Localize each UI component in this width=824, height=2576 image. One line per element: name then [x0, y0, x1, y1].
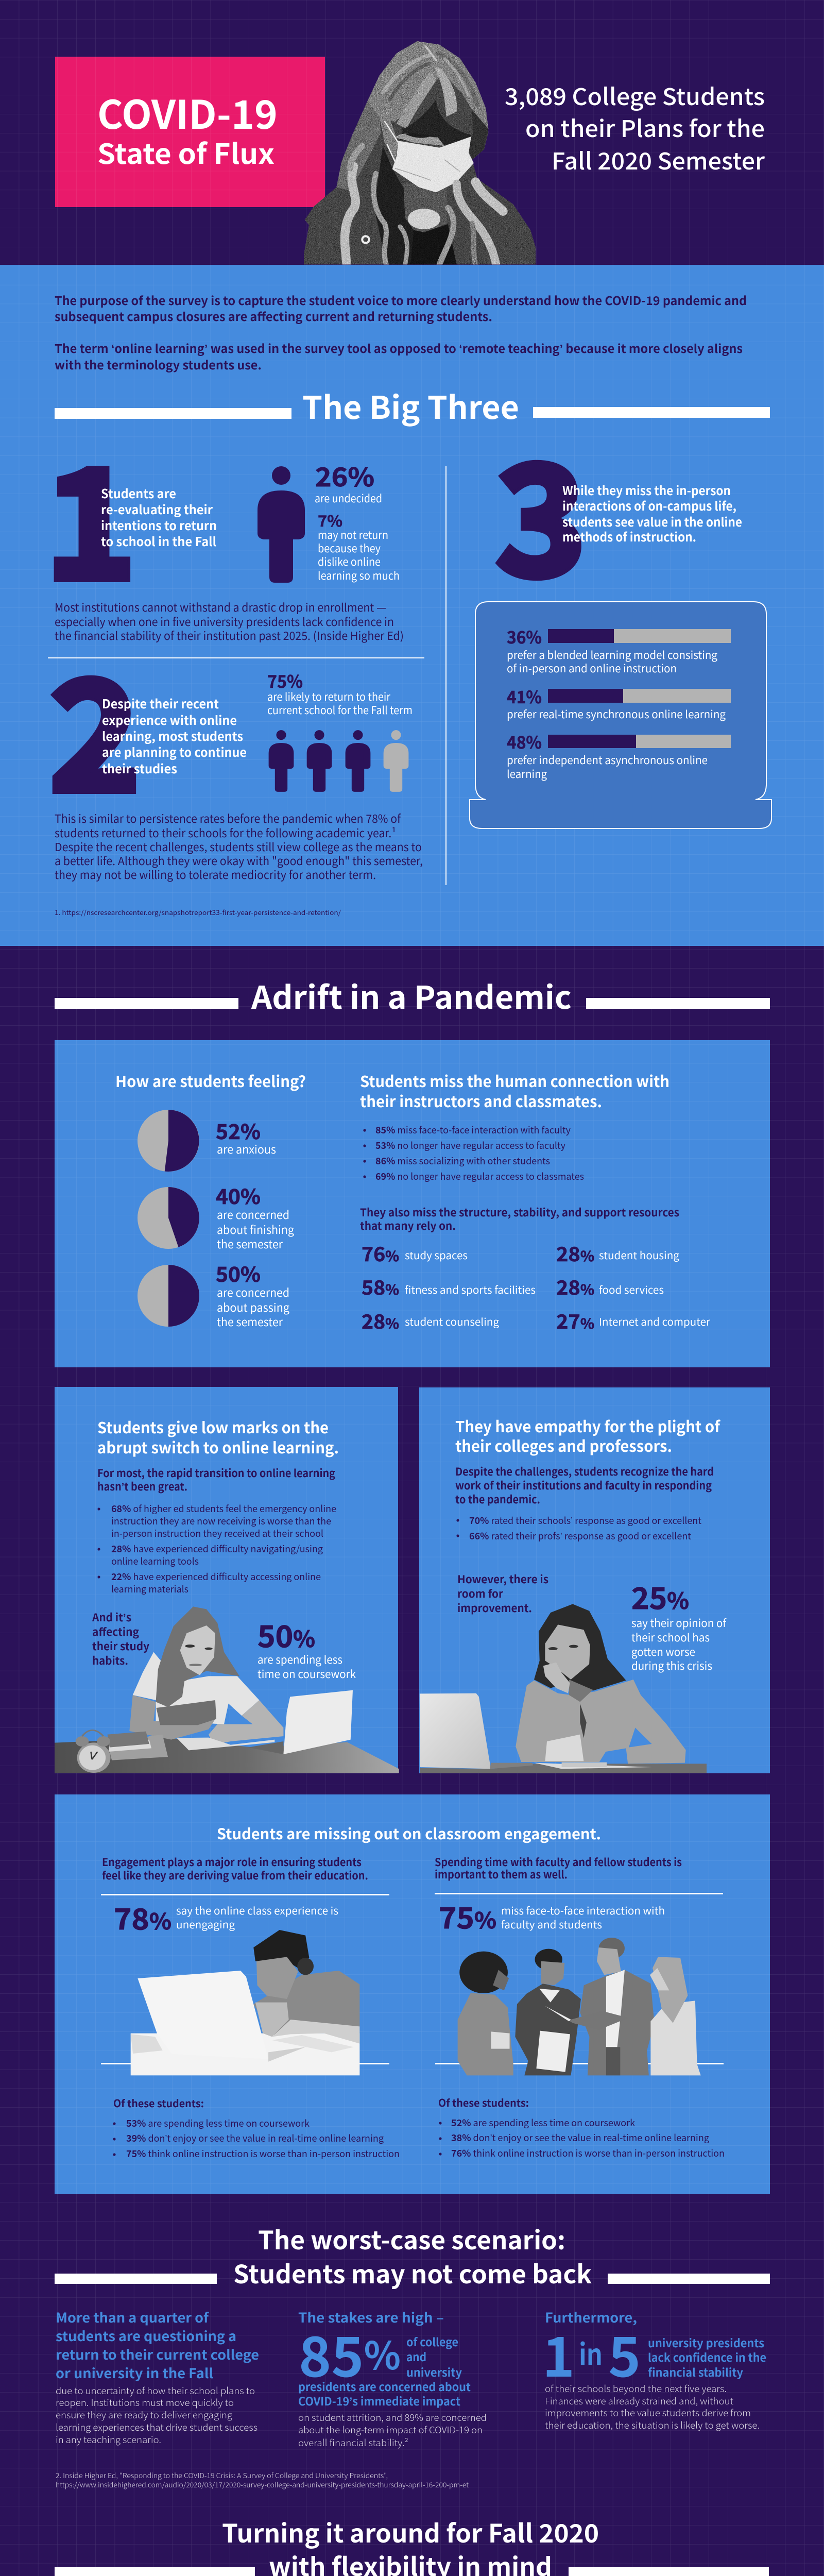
pie: 52% anxious — [138, 1110, 276, 1172]
pie: 50% passing: about passing — [217, 1299, 290, 1315]
stat: 75% — [267, 668, 413, 718]
callout: study habits: habits. — [92, 1653, 128, 1668]
pie: 40% finishing: 40% — [216, 1180, 261, 1210]
bar: 36% blended: 36% — [507, 624, 542, 649]
finding 1 statement: to school in the Fall — [101, 532, 216, 550]
pie: 40% finishing: about finishing — [217, 1221, 295, 1238]
heading: worst-case scenario — [55, 2221, 770, 2291]
stat: 75%: 75% — [267, 668, 303, 693]
subheading: time with faculty — [435, 1854, 682, 1882]
stat: 25% opinion worse: gotten worse — [631, 1644, 695, 1659]
hero photo: masked student — [304, 41, 536, 264]
bullet list: online learning problems: instruction they are now receiving is worse than the — [111, 1514, 331, 1528]
text: enrollment note — [55, 599, 404, 643]
stats grid: resources: student housing — [599, 1247, 679, 1262]
header: title block — [55, 41, 765, 264]
stat: 1 in 5: 1 — [542, 2313, 575, 2393]
list: of these students left: 53% are spending less time on coursework — [126, 2116, 310, 2130]
title box: State of Flux — [97, 131, 274, 172]
icon: four people — [269, 730, 408, 792]
list: of these students right: Of these students: — [438, 2095, 529, 2110]
panel: finding two — [47, 612, 423, 917]
stat: 75% miss interaction: 75% — [439, 1895, 496, 1937]
stat: 25% opinion worse: their school has — [631, 1630, 710, 1645]
text: persistence note: Despite the recent challenges, students still view college as the means to — [55, 838, 422, 855]
heading: Adrift in a Pandemic: Adrift in a Pandemic — [251, 972, 572, 1018]
stats grid: resources: food services — [599, 1282, 664, 1297]
bullet list: human connection: 69% no longer have regular access to classmates — [375, 1170, 584, 1183]
bar: 41% synchronous: prefer real-time synchronous online learning — [507, 706, 726, 722]
finding 3 statement: interactions of on-campus life, — [562, 496, 736, 514]
column: more than a quarter: return to their current college — [56, 2345, 259, 2364]
heading: turning it around — [55, 2514, 769, 2576]
column: 1 in 5 presidents: of their schools beyond the next five years. — [545, 2382, 727, 2395]
finding 2 statement: Despite their recent — [102, 694, 219, 712]
finding 3 statement: methods of instruction. — [562, 527, 696, 545]
stats grid: resources: Internet and computer — [599, 1314, 710, 1329]
stat: 7% may not return: because they — [318, 540, 381, 556]
column: more than a quarter: or university in the Fall — [56, 2363, 213, 2382]
subheading: rapid transition — [97, 1465, 335, 1494]
panel: empathy for colleges — [420, 1414, 727, 1773]
column: more than a quarter: students are questioning a — [56, 2326, 236, 2345]
stat: 50% less coursework — [258, 1613, 356, 1682]
numeral 1: 1 — [43, 400, 139, 626]
pie: 40% finishing: are concerned — [217, 1206, 289, 1223]
numeral 3: 3 — [493, 397, 589, 622]
list: of these students right: 38% don’t enjoy or see the value in real-time online learning — [451, 2131, 709, 2144]
list: of these students left — [113, 2095, 400, 2160]
finding 2 statement: are planning to continue — [102, 742, 247, 760]
column: more than a quarter: learning experiences that drive student success — [56, 2420, 258, 2434]
heading: worst-case scenario: The worst-case scenario: — [258, 2221, 565, 2257]
text: enrollment note: especially when one in five university presidents lack confidence in — [55, 613, 394, 630]
intro text: subsequent campus closures are affecting current and returning students. — [55, 307, 492, 325]
subtitle: on their Plans for the — [525, 110, 765, 144]
subheading: rapid transition: For most, the rapid transition to online learning — [97, 1465, 335, 1481]
footnote 1: 1. https://nscresearchcenter.org/snapshotreport33-first-year-persistence-and-retention/ — [55, 907, 341, 917]
column: more than a quarter: in any teaching scenario. — [56, 2433, 161, 2446]
heading: engagement: Students are missing out on classroom engagement. — [217, 1822, 601, 1844]
column: 85% stakes: overall financial stability.² — [298, 2436, 408, 2449]
title box — [55, 57, 325, 207]
stats grid: resources: fitness and sports facilities — [405, 1282, 536, 1297]
subheading: human connection: Students miss the human connection with — [360, 1069, 670, 1092]
finding 2 statement: learning, most students — [102, 726, 243, 744]
panel: classroom engagement — [101, 1822, 725, 2160]
subheading: value from education: feel like they are deriving value from their education. — [102, 1868, 368, 1883]
bullet list: ratings — [456, 1514, 701, 1543]
finding 3 statement — [562, 481, 742, 545]
footnote 2: 2. Inside Higher Ed, "Responding to the COVID-19 Crisis: A Survey of College and University Presidents", — [56, 2470, 388, 2480]
callout: study habits: affecting — [92, 1624, 139, 1639]
callout: room for improvement: room for — [457, 1586, 504, 1601]
panel: finding one — [43, 400, 404, 643]
subheading: How are students feeling?: How are students feeling? — [115, 1069, 306, 1092]
footnote 2: https://www.insidehighered.com/audio/2020/03/17/2020-survey-college-and-university-presidents-thursday-april-16-200-pm-et — [56, 2479, 469, 2489]
panel: finding three — [470, 397, 771, 828]
pie: 52% anxious: 52% — [216, 1115, 261, 1145]
pie: 50% passing: the semester — [217, 1313, 283, 1330]
stat: 75%: are likely to return to their — [267, 689, 391, 704]
photo: student with headphones and laptop — [131, 1930, 359, 2075]
footnote 2 — [56, 2470, 469, 2489]
finding 3 statement: students see value in the online — [562, 512, 742, 530]
column: more than a quarter: More than a quarter of — [56, 2308, 209, 2327]
pie: 50% passing: 50% — [216, 1258, 261, 1288]
subheading: structure and stability: that many rely on. — [360, 1218, 456, 1233]
bar: 36% blended — [507, 624, 731, 676]
heading: turning it around: Turning it around for Fall 2020 — [222, 2514, 599, 2550]
stats grid: resources: 28% — [362, 1306, 399, 1334]
list: of these students left: Of these students: — [113, 2095, 204, 2110]
bullet list: human connection: 86% miss socializing with other students — [375, 1154, 550, 1167]
stats grid: resources: 27% — [556, 1306, 594, 1334]
list: of these students right: 76% think online instruction is worse than in-person instruction — [451, 2146, 725, 2160]
stat: 85%: 85 — [299, 2313, 364, 2393]
text: persistence note: a better life. Although they were okay with "good enough" this semester, — [55, 852, 423, 869]
stat: 1 in 5: in — [579, 2332, 603, 2374]
photo: bored student at desk — [420, 1604, 707, 1773]
intro text: The term ‘online learning’ was used in the survey tool as opposed to ‘remote teaching’ because it more closely aligns — [55, 339, 743, 357]
stat: 26% undecided — [315, 457, 382, 506]
subheading: despite challenges — [455, 1464, 714, 1507]
list: of these students right — [438, 2095, 725, 2160]
column: 85% stakes: university — [406, 2364, 462, 2380]
text: enrollment note: Most institutions cannot withstand a drastic drop in enrollment — — [55, 599, 386, 615]
subheading: time with faculty: Spending time with faculty and fellow students is — [435, 1854, 682, 1870]
bullet list: human connection: 53% no longer have regular access to faculty — [375, 1139, 566, 1152]
stat: 50% less coursework: 50% — [258, 1613, 315, 1656]
heading: empathy: their colleges and professors. — [455, 1434, 672, 1456]
finding 2 statement: experience with online — [102, 710, 237, 728]
bullet list: online learning problems: 22% have experienced difficulty accessing online — [111, 1570, 321, 1583]
intro text: The purpose of the survey is to capture the student voice to more clearly understand how the COVID-19 pandemic and — [55, 291, 747, 309]
stat: 78% unengaging: say the online class experience is — [176, 1903, 338, 1918]
column: 85% stakes: and — [406, 2348, 426, 2365]
finding 1 statement: re-evaluating their — [101, 500, 213, 518]
subheading: despite challenges: work of their institutions and faculty in responding — [455, 1478, 712, 1493]
stats grid: resources: 76% — [362, 1239, 399, 1267]
stat: 75% miss interaction: faculty and students — [501, 1917, 602, 1931]
stats grid: resources: student counseling — [405, 1314, 499, 1329]
text: persistence note — [55, 810, 423, 883]
bullet list: online learning problems: 68% of higher ed students feel the emergency online — [111, 1502, 336, 1515]
subtitle — [505, 78, 765, 176]
bullet list: online learning problems: online learning tools — [111, 1554, 199, 1568]
subtitle: Fall 2020 Semester — [552, 143, 765, 176]
photo: student at laptop with clock — [55, 1606, 399, 1773]
text: enrollment note: the financial stability of their institution past 2025. (Inside Higher Ed) — [55, 627, 404, 643]
column: 1 in 5 presidents: Finances were already strained and, without — [545, 2394, 734, 2408]
stat: 7% may not return: 7% — [318, 509, 342, 531]
list: of these students left: 75% think online instruction is worse than in-person instruction — [126, 2147, 400, 2160]
bullet list: online learning problems — [97, 1502, 336, 1596]
callout: room for improvement — [457, 1571, 548, 1616]
bar: 41% synchronous: 41% — [507, 684, 542, 708]
callout: study habits — [92, 1609, 149, 1668]
panel: feelings and connection — [115, 1069, 710, 1334]
bullet list: online learning problems: in-person instruction they received at their school — [111, 1527, 323, 1540]
heading: worst-case scenario: Students may not come back — [233, 2255, 592, 2291]
stat: 78% unengaging: unengaging — [176, 1917, 235, 1931]
stat: 25% opinion worse — [631, 1574, 727, 1673]
heading: Adrift in a Pandemic — [55, 972, 770, 1018]
intro text — [55, 291, 747, 373]
finding 2 statement: their studies — [102, 759, 177, 777]
callout: study habits: their study — [92, 1638, 149, 1654]
stats grid: resources — [362, 1239, 710, 1334]
stat: 50% less coursework: are spending less — [258, 1652, 342, 1667]
callout: room for improvement: improvement. — [457, 1600, 532, 1616]
column: 1 in 5 presidents: their education, the situation is likely to get worse. — [545, 2418, 760, 2432]
icon: person — [258, 466, 305, 583]
bullet list: ratings: 70% rated their schools’ response as good or excellent — [469, 1514, 701, 1527]
finding 1 statement — [101, 484, 217, 550]
bullet list: human connection: 85% miss face-to-face interaction with faculty — [375, 1123, 571, 1137]
stat: 26% undecided: are undecided — [315, 490, 382, 506]
photo: group of students and professor — [458, 1938, 701, 2075]
column: 85% stakes: The stakes are high – — [298, 2308, 444, 2327]
finding 1 statement: intentions to return — [101, 516, 217, 534]
column: 1 in 5 presidents — [542, 2308, 766, 2432]
heading: low marks: Students give low marks on the — [97, 1415, 329, 1438]
column: 1 in 5 presidents: lack confidence in the — [648, 2349, 766, 2365]
column: 85% stakes: COVID-19’s immediate impact — [298, 2393, 460, 2409]
column: 1 in 5 presidents: Furthermore, — [545, 2308, 637, 2327]
bullet list: online learning problems: learning materials — [111, 1582, 188, 1596]
title box: COVID-19 — [97, 83, 278, 140]
finding 2 statement — [102, 694, 247, 777]
subheading: structure and stability — [360, 1205, 679, 1233]
stat: 75% miss interaction — [439, 1895, 665, 1937]
subheading: rapid transition: hasn’t been great. — [97, 1479, 187, 1494]
bar: 48% asynchronous: 48% — [507, 729, 542, 754]
stat: 1 in 5 — [542, 2313, 641, 2393]
column: 1 in 5 presidents: financial stability — [648, 2364, 743, 2380]
pie: 40% finishing: the semester — [217, 1235, 283, 1252]
pie: 40% finishing — [138, 1180, 295, 1252]
stat: 7% may not return — [318, 509, 400, 583]
stat: 7% may not return: dislike online — [318, 554, 381, 569]
bullet list: human connection — [363, 1123, 584, 1183]
bar: 48% asynchronous: prefer independent asynchronous online — [507, 752, 708, 768]
panel: low marks on online switch — [55, 1415, 399, 1773]
text: persistence note: students returned to their schools for the following academic year.¹ — [55, 824, 396, 841]
subheading: human connection: their instructors and classmates. — [360, 1089, 602, 1112]
subtitle: 3,089 College Students — [505, 78, 765, 112]
subheading: time with faculty: important to them as well. — [435, 1867, 568, 1882]
stat: 26% undecided: 26% — [315, 457, 374, 494]
column: 85% stakes — [298, 2308, 487, 2449]
subheading: value from education: Engagement plays a major role in ensuring students — [102, 1854, 362, 1870]
stat: 25% opinion worse: 25% — [631, 1574, 689, 1618]
subheading: despite challenges: to the pandemic. — [455, 1492, 540, 1507]
bar: 36% blended: prefer a blended learning model consisting — [507, 647, 717, 663]
bullet list: online learning problems: 28% have experienced difficulty navigating/using — [111, 1542, 323, 1555]
callout: study habits: And it’s — [92, 1609, 131, 1625]
heading: low marks: abrupt switch to online learning. — [97, 1435, 339, 1458]
column: 85% stakes: presidents are concerned about — [298, 2378, 471, 2395]
stat: 78% unengaging — [114, 1896, 338, 1938]
stat: 75% miss interaction: miss face-to-face interaction with — [501, 1903, 665, 1918]
pie: 50% passing: are concerned — [217, 1284, 289, 1300]
stat: 25% opinion worse: say their opinion of — [631, 1615, 727, 1631]
finding 3 statement: While they miss the in-person — [562, 481, 731, 499]
list: of these students left: 39% don’t enjoy or see the value in real-time online learning — [126, 2131, 384, 2145]
bar: 48% asynchronous: learning — [507, 766, 547, 782]
column: 85% stakes: about the long-term impact of COVID-19 on — [298, 2423, 483, 2436]
heading: empathy — [455, 1414, 721, 1456]
stats grid: resources: 28% — [556, 1239, 594, 1267]
column: 1 in 5 presidents: improvements to the value students derive from — [545, 2406, 751, 2419]
column: 85% stakes: on student attrition, and 89% are concerned — [298, 2411, 487, 2424]
subheading: despite challenges: Despite the challenges, students recognize the hard — [455, 1464, 714, 1479]
stat: 7% may not return: may not return — [318, 527, 388, 543]
stat: 78% unengaging: 78% — [114, 1896, 171, 1938]
scroll card with bar chart — [470, 602, 771, 828]
stat: 1 in 5: 5 — [608, 2313, 641, 2393]
numeral 2: 2 — [47, 612, 143, 838]
intro text: with the terminology students use. — [55, 355, 262, 373]
text: persistence note: they may not be willing to tolerate mediocrity for another term. — [55, 866, 376, 883]
heading: low marks — [97, 1415, 339, 1458]
list: of these students right: 52% are spending less time on coursework — [451, 2116, 635, 2129]
stat: 75%: current school for the Fall term — [267, 702, 413, 718]
column: more than a quarter — [56, 2308, 259, 2446]
stats grid: resources: 28% — [556, 1272, 594, 1300]
bar: 48% asynchronous — [507, 729, 731, 782]
heading: empathy: They have empathy for the plight of — [455, 1414, 721, 1437]
bullet list: ratings: 66% rated their profs’ response as good or excellent — [469, 1529, 691, 1543]
stat: 85%: % — [364, 2326, 401, 2381]
subheading: value from education — [102, 1854, 368, 1883]
subheading: structure and stability: They also miss the structure, stability, and support resources — [360, 1205, 679, 1220]
finding 1 statement: Students are — [101, 484, 176, 502]
bar: 41% synchronous — [507, 684, 731, 722]
heading: The Big Three — [55, 382, 770, 428]
stat: 50% less coursework: time on coursework — [258, 1666, 356, 1682]
stat: 7% may not return: learning so much — [318, 568, 400, 583]
column: 85% stakes: of college — [406, 2333, 458, 2350]
column: more than a quarter: reopen. Institutions must move quickly to — [56, 2396, 234, 2409]
bar: 36% blended: of in-person and online instruction — [507, 660, 677, 676]
pie: 50% passing — [138, 1258, 290, 1330]
heading: The Big Three: The Big Three — [302, 382, 519, 428]
column: 1 in 5 presidents: university presidents — [648, 2334, 764, 2351]
stats grid: resources: study spaces — [405, 1247, 468, 1262]
callout: room for improvement: However, there is — [457, 1571, 548, 1587]
stats grid: resources: 58% — [362, 1272, 399, 1300]
pie: 52% anxious: are anxious — [217, 1141, 276, 1157]
subheading: human connection — [360, 1069, 670, 1112]
column: more than a quarter: due to uncertainty of how their school plans to — [56, 2384, 255, 2397]
stat: 25% opinion worse: during this crisis — [631, 1658, 712, 1673]
column: more than a quarter: ensure they are ready to deliver engaging — [56, 2408, 232, 2421]
text: persistence note: This is similar to persistence rates before the pandemic when 78% of — [55, 810, 401, 826]
